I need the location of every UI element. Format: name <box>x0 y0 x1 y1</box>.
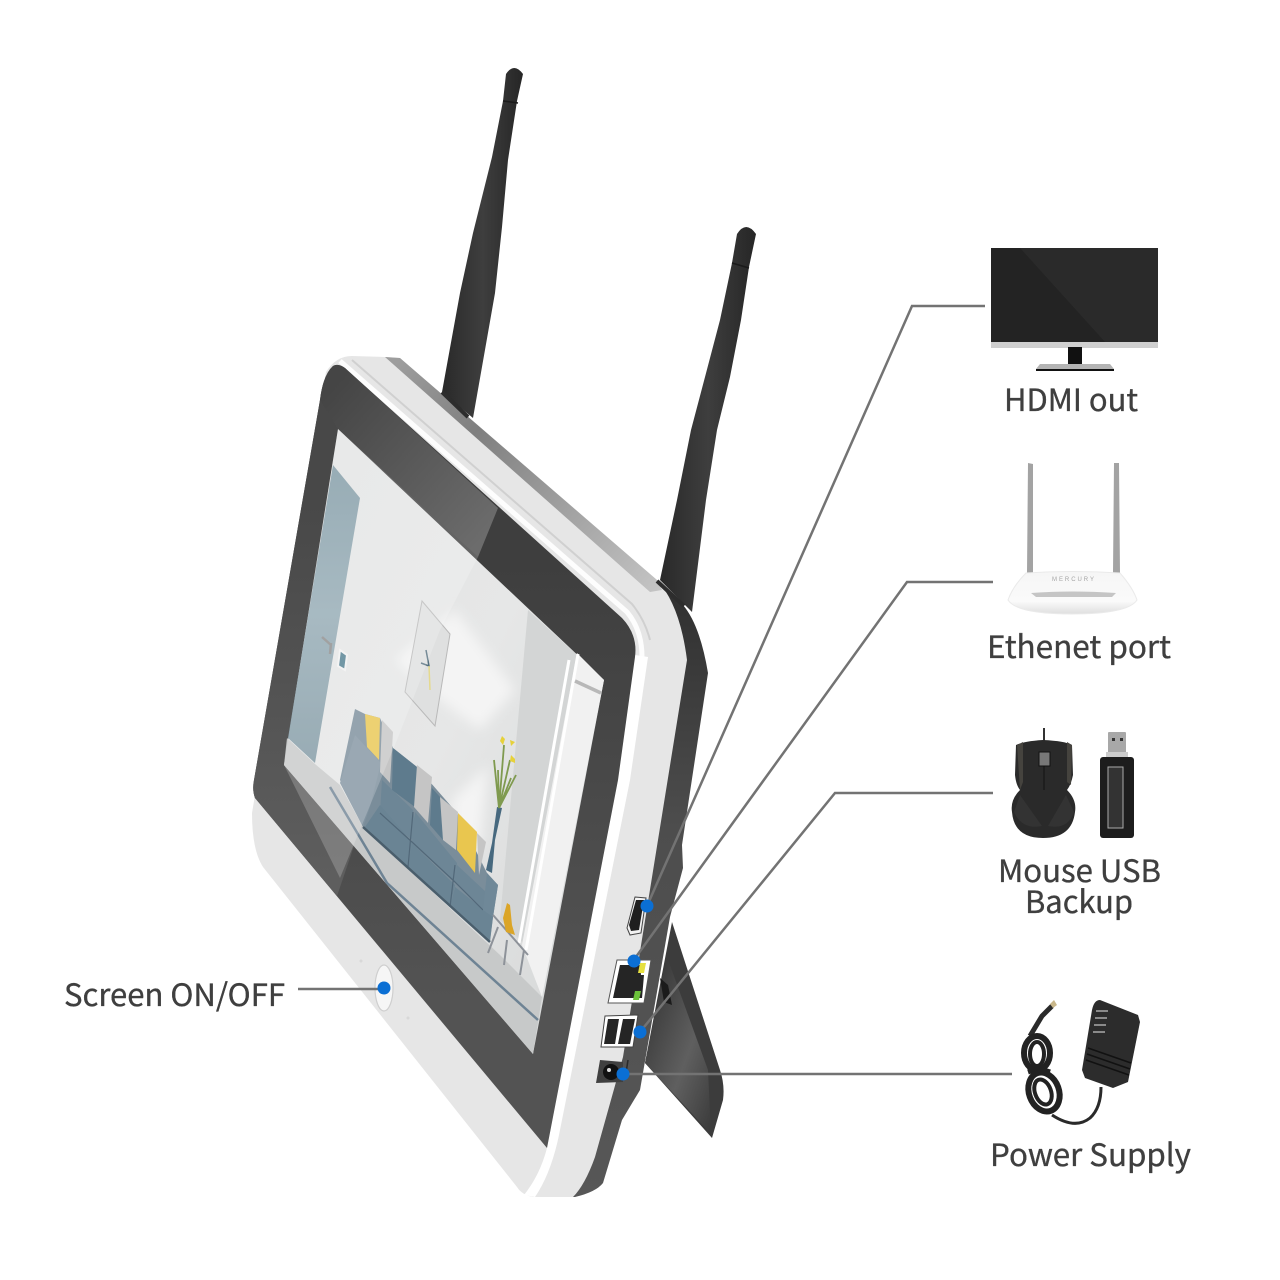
Ethernet port <box>608 960 651 1003</box>
blue dot: HDMI <box>640 900 654 912</box>
connector line: HDMI <box>647 306 985 906</box>
device: NVR tablet with antennas <box>252 68 756 1197</box>
USB ports <box>601 1015 638 1047</box>
screen: floor <box>284 738 542 1054</box>
label: Ethenet port: Ethenet port <box>987 622 1171 667</box>
connector line: Ethernet <box>633 582 993 961</box>
white right edge strip <box>524 655 648 1197</box>
bezel reflection: upper <box>320 365 498 557</box>
screen: side table <box>488 915 528 975</box>
icon: router: MERCURY <box>1052 577 1094 583</box>
screen: wall light patches <box>395 610 515 850</box>
blue dot: Ethernet <box>628 954 640 968</box>
screen: window <box>522 653 604 997</box>
screen: yellow ornament <box>503 903 515 935</box>
connector line: screen button <box>298 988 384 990</box>
screen: right wall <box>500 610 577 945</box>
screen: yellow pillow 2 <box>457 813 477 873</box>
icon: monitor <box>991 248 1158 371</box>
icon: mouse <box>1012 728 1075 838</box>
label: Power Supply: Power Supply <box>990 1130 1191 1175</box>
screen: sofa seat cushions <box>380 780 487 910</box>
screen: wall clock <box>405 601 450 726</box>
screen <box>284 429 604 1054</box>
top outer grey band <box>385 357 662 592</box>
label: Mouse USB Backup: Mouse USB <box>998 846 1161 891</box>
antenna right <box>660 227 756 612</box>
blue dot: power <box>616 1068 630 1080</box>
screen: clock hands <box>421 650 429 666</box>
top inner highlight line <box>352 360 650 640</box>
silver frame <box>252 356 687 1197</box>
screen: flowers <box>494 745 516 808</box>
bezel <box>253 365 635 1148</box>
label: Screen ON/OFF: Screen ON/OFF <box>64 970 285 1015</box>
label: HDMI out: HDMI out <box>1004 375 1138 420</box>
antenna socket shadows <box>442 392 684 606</box>
icon: router <box>1008 463 1137 614</box>
icon: USB drive <box>1100 732 1134 838</box>
blue dot: USB <box>634 1026 646 1038</box>
screen: door <box>288 465 360 763</box>
screen: rug line <box>330 787 538 1020</box>
blue dot: screen button <box>378 982 390 994</box>
label: Mouse USB Backup <box>998 846 1161 922</box>
screen: grey pillows <box>380 720 486 875</box>
screen: door handle <box>322 637 331 654</box>
connector line: USB <box>640 793 993 1032</box>
label: Mouse USB Backup: Backup <box>1025 877 1133 922</box>
white edge line <box>340 361 642 657</box>
stand <box>645 922 724 1138</box>
antenna left <box>442 68 523 418</box>
screen: vase <box>486 807 502 873</box>
screen: reflection overlay <box>284 429 478 878</box>
dark rear shell <box>540 580 708 1197</box>
screen: sofa <box>340 709 498 942</box>
bezel reflection: left <box>253 400 355 896</box>
screen: sofa front <box>365 805 493 940</box>
screen: wall switch <box>338 650 347 670</box>
icon: power adapter <box>1023 1000 1140 1123</box>
screen: window frame <box>519 654 578 950</box>
power jack <box>596 1060 628 1083</box>
screen: yellow pillow <box>365 714 380 760</box>
power button <box>360 960 410 1020</box>
connector line: power <box>623 1073 1012 1075</box>
HDMI port <box>627 897 646 935</box>
